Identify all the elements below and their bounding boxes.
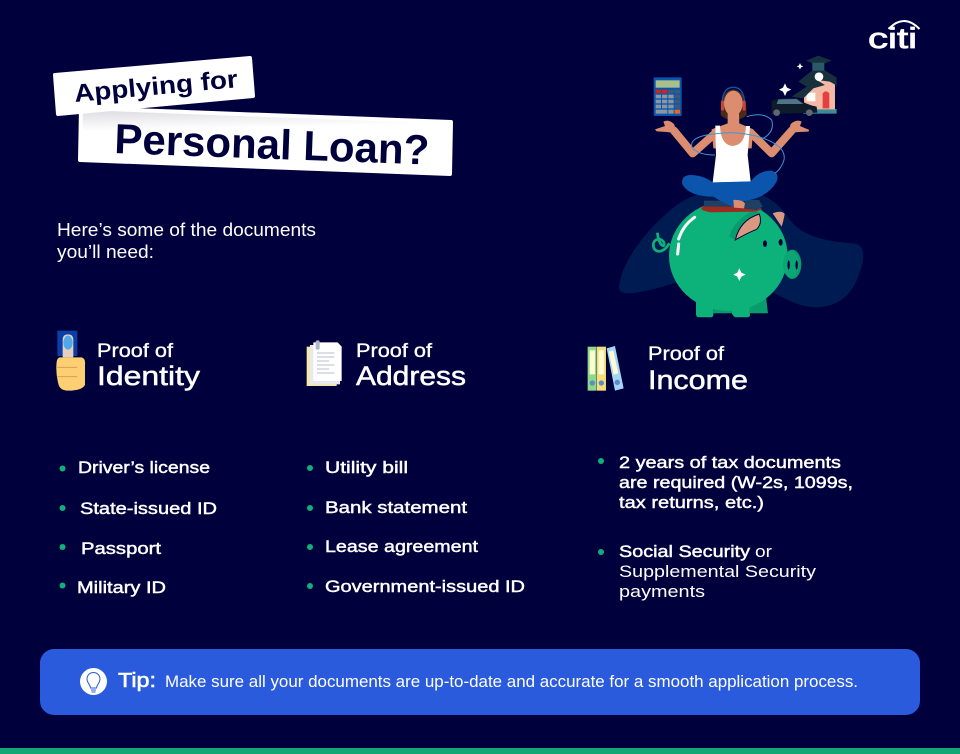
list: income documents: Social Security xyxy=(619,542,751,561)
list: identity documents: Passport xyxy=(81,539,161,558)
section: Proof of Identity: Proof of xyxy=(97,340,174,362)
background blob xyxy=(619,190,863,307)
list: identity documents: Military ID xyxy=(77,578,166,597)
section: Proof of Address: Proof of xyxy=(356,340,433,362)
list: identity documents: Driver’s license xyxy=(78,458,210,477)
list: address documents: Utility bill xyxy=(325,458,408,477)
section: Proof of Identity xyxy=(56,331,201,391)
panel: tip: Make sure all your documents are up-to-date and accurate for a smooth application process. xyxy=(165,673,858,691)
panel: tip: Tip: xyxy=(118,670,156,692)
list: income documents: Supplemental Security xyxy=(619,562,817,581)
section: Proof of Address: Address xyxy=(356,361,466,391)
list: income documents: are required (W-2s, 1099s, xyxy=(619,473,853,492)
intro text xyxy=(57,219,316,262)
list: address documents xyxy=(307,458,525,596)
list: income documents: 2 years of tax documents xyxy=(619,453,841,472)
list: address documents: Bank statement xyxy=(325,498,467,517)
list: income documents: tax returns, etc.) xyxy=(619,493,764,512)
section: Proof of Identity: Identity xyxy=(97,361,201,391)
panel: tip xyxy=(40,649,920,715)
list: income documents: or xyxy=(755,542,772,561)
section: Proof of Address xyxy=(307,340,466,391)
list: identity documents: State-issued ID xyxy=(80,499,217,518)
intro text: Here’s some of the documents xyxy=(57,219,316,240)
title: Applying for: Applying for xyxy=(73,65,239,108)
title: Applying for xyxy=(55,58,253,114)
illustration: woman meditating on piggy bank xyxy=(619,56,863,317)
title: Personal Loan?: Personal Loan? xyxy=(114,115,430,174)
list: address documents: Lease agreement xyxy=(325,537,478,556)
calculator xyxy=(654,77,682,116)
icon: binders xyxy=(588,346,624,391)
icon: paper stack xyxy=(307,340,342,386)
list: income documents: payments xyxy=(619,582,705,601)
piggy bank xyxy=(653,201,801,317)
section: Proof of Income xyxy=(588,343,748,395)
list: identity documents xyxy=(60,458,217,597)
section: Proof of Income: Proof of xyxy=(648,343,725,365)
icon: light bulb xyxy=(80,668,107,695)
icon: thumbprint xyxy=(56,331,85,391)
logo: citi: citi xyxy=(868,23,917,55)
woman xyxy=(655,87,809,212)
logo: citi xyxy=(868,21,920,55)
section: Proof of Income: Income xyxy=(648,365,748,395)
list: income documents xyxy=(598,453,853,601)
house, graduation cap and car xyxy=(772,56,837,116)
list: address documents: Government-issued ID xyxy=(325,577,525,596)
intro text: you’ll need: xyxy=(57,241,154,262)
